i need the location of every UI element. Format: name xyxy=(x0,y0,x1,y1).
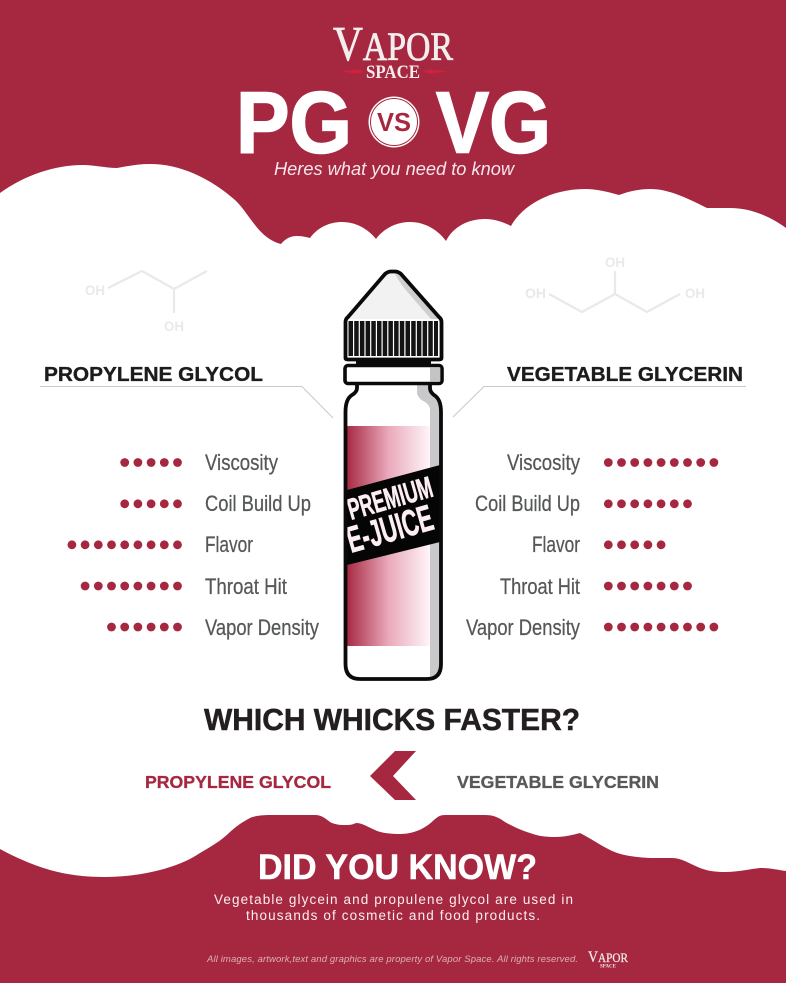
row: flavor xyxy=(68,532,253,557)
stats: propylene glycol xyxy=(68,450,320,640)
row: viscosity xyxy=(507,450,718,475)
tagline: Heres what you need to know xyxy=(274,159,515,179)
heading: did you know: DID YOU KNOW? xyxy=(258,848,537,887)
molecule: vegetable glycerin: OH xyxy=(525,286,546,301)
row: viscosity xyxy=(120,450,279,475)
fact text xyxy=(214,892,573,923)
cap cone xyxy=(346,272,441,319)
title: PG vs VG: PG xyxy=(236,74,352,172)
row: flavor xyxy=(532,532,665,557)
arrow: pointing left xyxy=(370,751,416,800)
label text: PREMIUM xyxy=(344,471,437,527)
heading: vegetable glycerin: VEGETABLE GLYCERIN xyxy=(507,363,743,386)
label text: E-JUICE xyxy=(342,497,438,561)
fact text: thousands of cosmetic and food products. xyxy=(246,908,540,923)
row: throat hit xyxy=(500,574,692,599)
stats: vegetable glycerin xyxy=(466,450,718,640)
bottle illustration xyxy=(342,272,442,679)
label band xyxy=(347,465,440,565)
fact text: Vegetable glycein and propulene glycol are used in xyxy=(214,892,573,907)
row: throat hit: Throat Hit xyxy=(500,574,581,599)
row: vapor density xyxy=(466,615,718,640)
row: coil build up: Coil Build Up xyxy=(205,491,311,516)
row: flavor: Flavor xyxy=(205,532,253,557)
answer: propylene glycol: PROPYLENE GLYCOL xyxy=(145,772,331,792)
answer: vegetable glycerin: VEGETABLE GLYCERIN xyxy=(457,772,659,792)
cap outline xyxy=(346,272,442,360)
molecule: propylene glycol: OH xyxy=(85,283,105,298)
leader line left xyxy=(40,386,333,418)
title: PG vs VG xyxy=(236,74,551,172)
bottle outline xyxy=(346,384,441,679)
neck ring xyxy=(356,358,431,365)
molecule: vegetable glycerin xyxy=(525,255,705,312)
copyright note: All images, artwork,text and graphics are property of Vapor Space. All rights reserved. xyxy=(206,954,578,965)
title: PG vs VG: VG xyxy=(436,74,551,172)
label text xyxy=(342,471,438,561)
leader line right xyxy=(453,386,746,417)
logo: Vapor Space: VAPOR xyxy=(333,16,453,71)
row: throat hit xyxy=(81,574,288,599)
footer logo: SPACE xyxy=(600,964,616,970)
row: viscosity: Viscosity xyxy=(507,450,581,475)
row: coil build up xyxy=(120,491,311,516)
row: viscosity: Viscosity xyxy=(205,450,279,475)
row: coil build up: Coil Build Up xyxy=(475,491,580,516)
molecule: propylene glycol xyxy=(85,271,207,334)
cap ribs xyxy=(348,321,438,356)
row: vapor density xyxy=(107,615,320,640)
title: PG vs VG: VS xyxy=(377,107,411,137)
logo: Vapor Space: SPACE xyxy=(366,62,420,83)
molecule: vegetable glycerin: OH xyxy=(605,255,625,270)
row: vapor density: Vapor Density xyxy=(466,615,581,640)
juice fill xyxy=(347,426,430,646)
row: throat hit: Throat Hit xyxy=(205,574,288,599)
row: flavor: Flavor xyxy=(532,532,580,557)
row: vapor density: Vapor Density xyxy=(205,615,320,640)
white cloud panel xyxy=(0,164,786,877)
cap skirt xyxy=(346,319,442,358)
footer logo: VAPOR xyxy=(588,949,628,966)
molecule: propylene glycol: OH xyxy=(164,319,184,334)
heading: propylene glycol: PROPYLENE GLYCOL xyxy=(44,363,263,386)
collar xyxy=(345,366,442,384)
bottle shading xyxy=(417,384,441,677)
heading: which whicks faster: WHICH WHICKS FASTER? xyxy=(204,703,580,737)
row: coil build up xyxy=(475,491,692,516)
bottle body xyxy=(346,384,441,679)
molecule: vegetable glycerin: OH xyxy=(685,286,705,301)
